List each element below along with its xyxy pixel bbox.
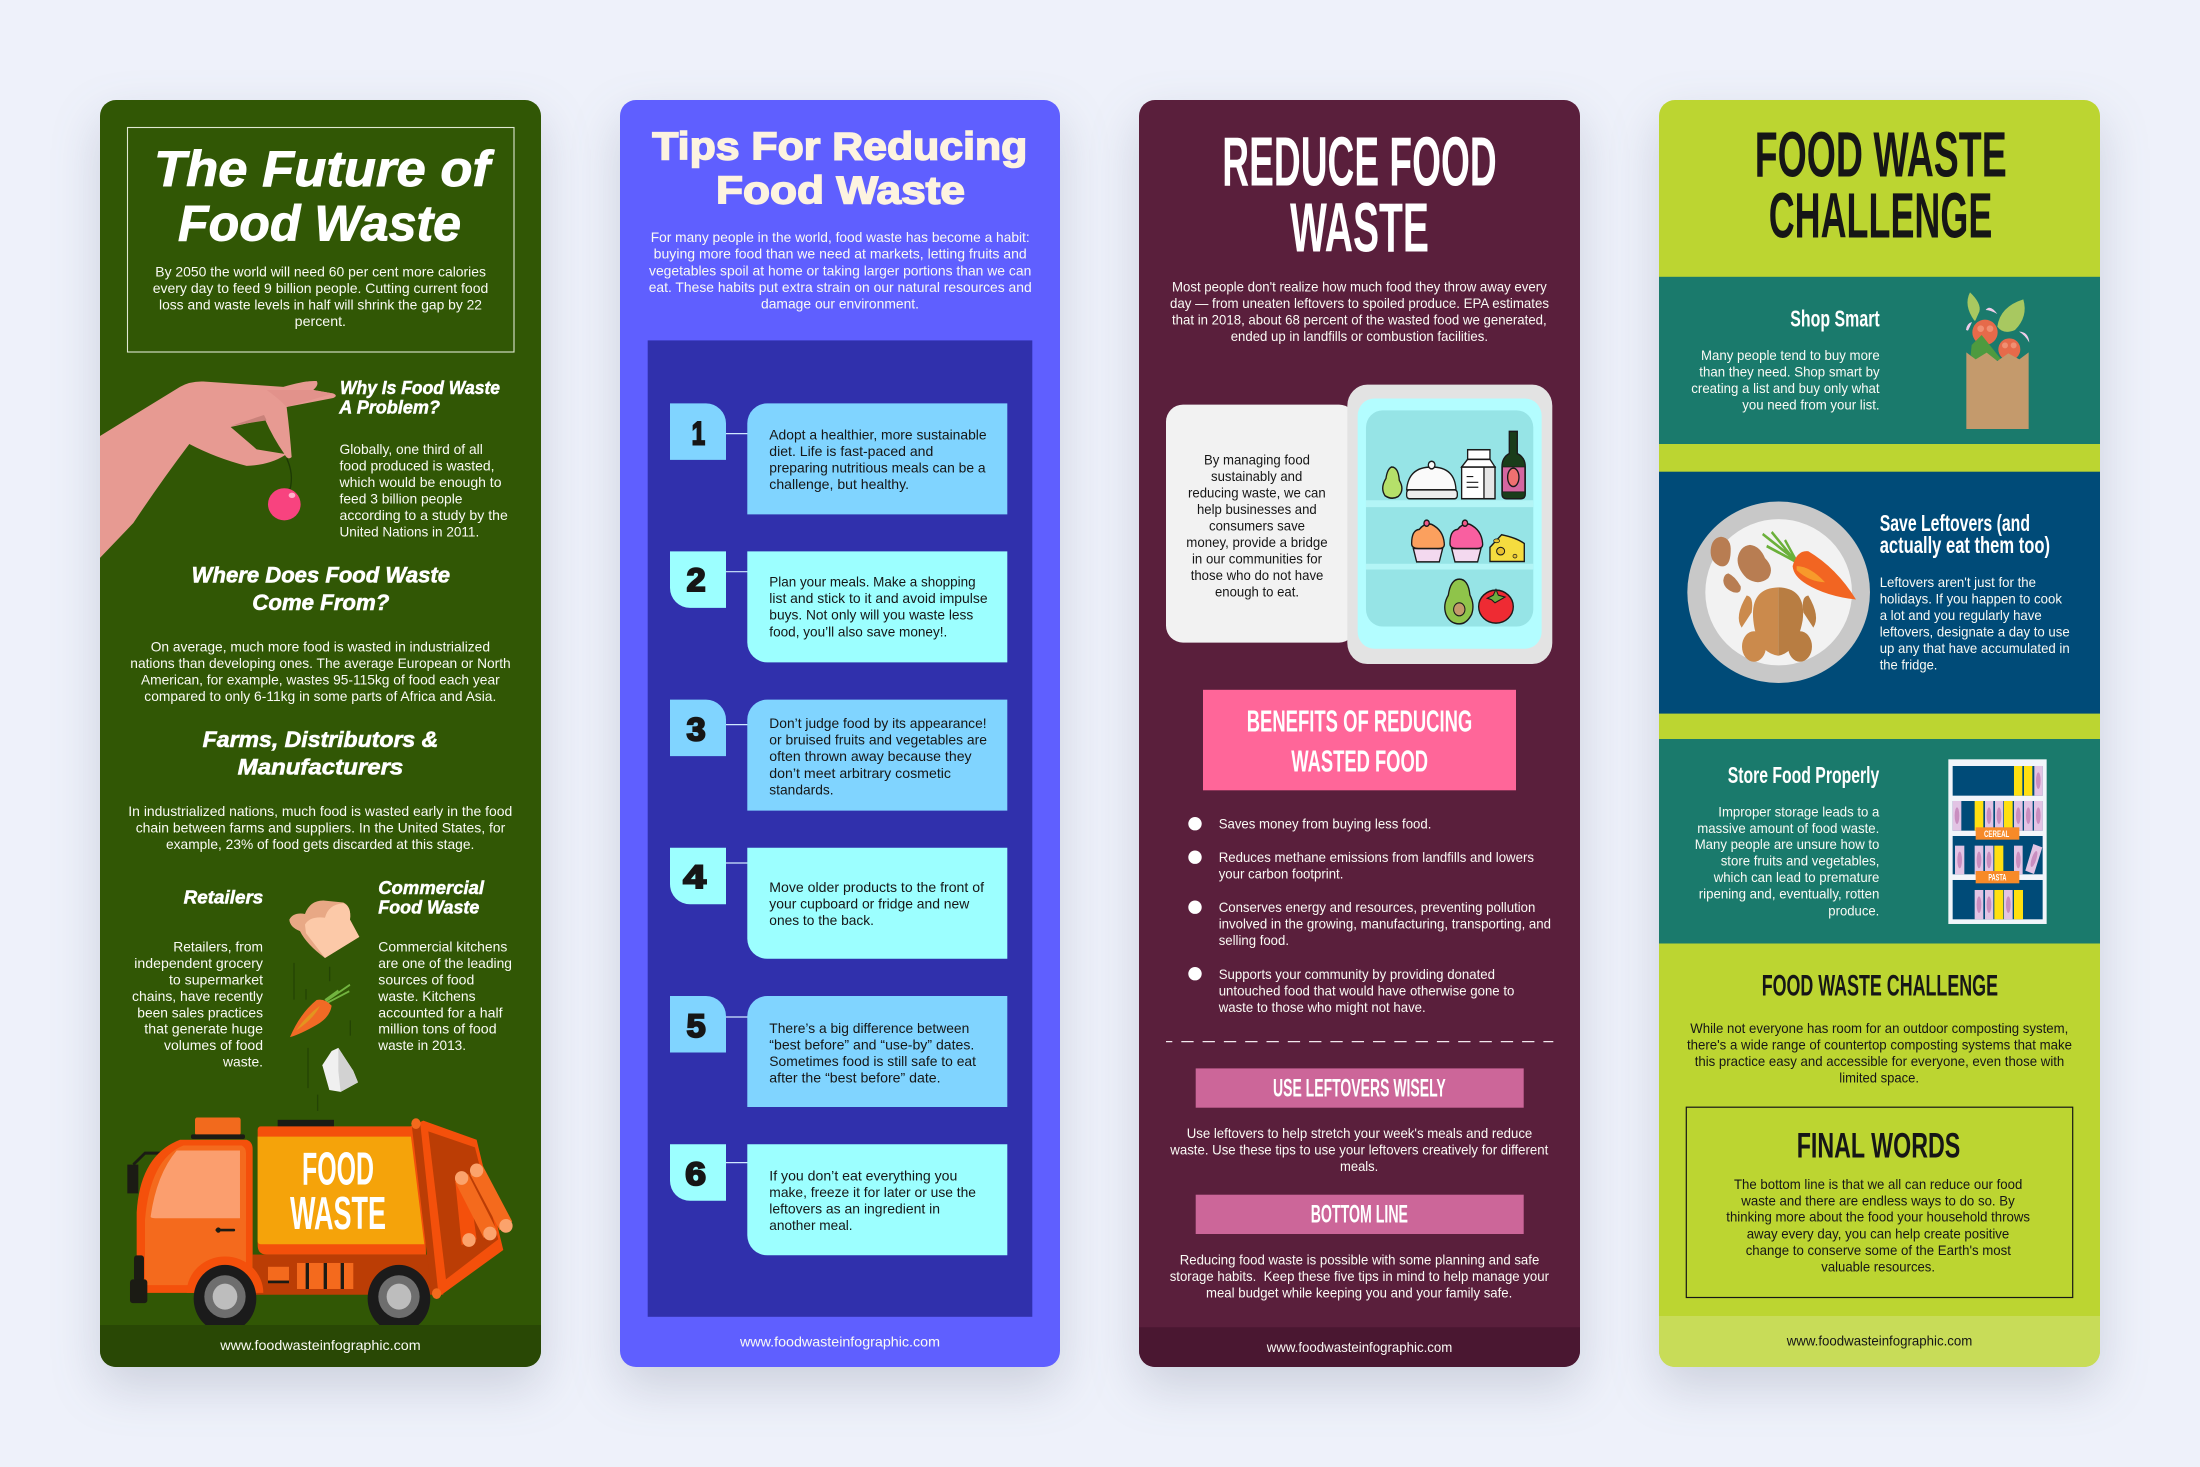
text: retailers: to supermarket bbox=[169, 971, 263, 987]
heading: commercial food waste bbox=[378, 878, 485, 918]
heading: use leftovers wisely bbox=[1196, 1068, 1524, 1108]
text: where does food waste come from: On average, much more food is wasted in industrialized bbox=[151, 639, 490, 655]
heading: why is food waste a problem: Why Is Food Waste bbox=[340, 378, 500, 398]
benefits list bbox=[1188, 816, 1551, 1015]
footer band bbox=[1659, 1316, 2100, 1367]
intro text: buying more food than we need at markets, letting fruits and bbox=[654, 246, 1027, 262]
tip 5: Sometimes food is still safe to eat bbox=[769, 1053, 976, 1069]
tip 5: “best before” and “use-by” dates. bbox=[769, 1037, 974, 1053]
text: final words: waste and there are endless ways to do so. By bbox=[1740, 1192, 2015, 1208]
text: why is food waste a problem: which would be enough to bbox=[338, 474, 502, 490]
callout card: enough to eat. bbox=[1215, 583, 1299, 599]
tip 1: preparing nutritious meals can be a bbox=[769, 460, 986, 476]
tip 1: challenge, but healthy. bbox=[769, 476, 909, 492]
text: commercial food waste bbox=[377, 938, 512, 1053]
title bbox=[1755, 119, 2007, 252]
tip 2: 2 bbox=[687, 562, 706, 598]
intro text: eat. These habits put extra strain on our natural resources and bbox=[649, 279, 1032, 295]
text: final words: The bottom line is that we all can reduce our food bbox=[1734, 1176, 2022, 1192]
text: why is food waste a problem: Globally, one third of all bbox=[340, 441, 483, 457]
tip 6: make, freeze it for later or use the bbox=[769, 1184, 976, 1200]
tips container bbox=[648, 340, 1032, 1317]
tip 6 bbox=[670, 1144, 1007, 1255]
text: bottom line: Reducing food waste is possible with some planning and safe bbox=[1180, 1251, 1540, 1267]
text: shop smart: Many people tend to buy more bbox=[1701, 347, 1880, 363]
heading: farms, distributors and manufacturers: Manufacturers bbox=[238, 754, 403, 779]
title box bbox=[128, 128, 514, 352]
title: Food Waste bbox=[716, 170, 965, 213]
footer band bbox=[100, 1325, 541, 1367]
text: bottom line: meal budget while keeping you and your family safe. bbox=[1206, 1284, 1512, 1300]
benefits list: selling food. bbox=[1219, 932, 1289, 948]
heading: why is food waste a problem bbox=[338, 378, 500, 418]
text: store food properly: Improper storage leads to a bbox=[1718, 803, 1879, 819]
text: shop smart: creating a list and buy only what bbox=[1691, 380, 1880, 396]
panel: Food Waste Challenge bbox=[1659, 100, 2100, 1367]
icon: pantry shelf: CEREAL bbox=[1984, 829, 2010, 839]
intro text: loss and waste levels in half will shrink the gap by 22 bbox=[159, 297, 482, 313]
text: food waste challenge bbox=[1687, 1020, 2072, 1085]
heading: use leftovers wisely: USE LEFTOVERS WISELY bbox=[1273, 1074, 1446, 1102]
callout card: money, provide a bridge bbox=[1186, 534, 1328, 550]
text: retailers: chains, have recently bbox=[132, 988, 263, 1004]
tip 2: buys. Not only will you waste less bbox=[769, 607, 973, 623]
tip 3 bbox=[670, 700, 1007, 811]
benefits list: your carbon footprint. bbox=[1219, 866, 1343, 882]
tip 2: list and stick to it and avoid impulse bbox=[769, 590, 988, 606]
text: store food properly bbox=[1695, 803, 1880, 918]
title: FOOD WASTE bbox=[1755, 119, 2007, 191]
text: shop smart bbox=[1691, 347, 1880, 412]
section: store food properly bbox=[1659, 739, 2100, 944]
heading: commercial food waste: Food Waste bbox=[378, 898, 479, 918]
intro text: vegetables spoil at home or taking larger portions than we can bbox=[649, 262, 1031, 278]
intro text: day — from uneaten leftovers to spoiled produce. EPA estimates bbox=[1170, 295, 1549, 311]
text: commercial food waste: are one of the leading bbox=[378, 955, 512, 971]
text: store food properly: massive amount of food waste. bbox=[1697, 820, 1879, 836]
text: why is food waste a problem bbox=[338, 441, 508, 539]
icon: falling food scraps bbox=[289, 901, 359, 1111]
tip 3: often thrown away because they bbox=[769, 748, 972, 764]
text: shop smart: you need from your list. bbox=[1742, 396, 1880, 412]
icon: pantry shelf bbox=[1948, 759, 2047, 924]
text: save leftovers: holidays. If you happen to cook bbox=[1880, 590, 2063, 606]
heading: shop smart: Shop Smart bbox=[1790, 305, 1880, 331]
panel: Reduce Food Waste bbox=[1139, 100, 1580, 1367]
text: retailers bbox=[132, 938, 263, 1070]
callout card: sustainably and bbox=[1211, 468, 1302, 484]
footer band: www.foodwasteinfographic.com bbox=[1266, 1339, 1452, 1355]
text: commercial food waste: Commercial kitchens bbox=[378, 938, 507, 954]
text: food waste challenge: this practice easy and accessible for everyone, even those with bbox=[1695, 1053, 2064, 1069]
icon: garbage truck bbox=[127, 1118, 513, 1332]
title: Food Waste bbox=[178, 195, 461, 251]
text: food waste challenge: there's a wide range of countertop composting systems that make bbox=[1687, 1037, 2072, 1053]
tip 5: after the “best before” date. bbox=[769, 1070, 941, 1086]
text: retailers: that generate huge bbox=[144, 1021, 263, 1037]
text: why is food waste a problem: according to a study by the bbox=[340, 507, 508, 523]
text: use leftovers wisely: Use leftovers to help stretch your week's meals and reduce bbox=[1187, 1125, 1532, 1141]
text: food waste challenge: While not everyone has room for an outdoor composting system, bbox=[1690, 1020, 2068, 1036]
intro text: every day to feed 9 billion people. Cutting current food bbox=[153, 280, 488, 296]
heading: save leftovers bbox=[1880, 510, 2050, 558]
text: save leftovers: the fridge. bbox=[1880, 656, 1937, 672]
text: use leftovers wisely bbox=[1169, 1125, 1548, 1174]
text: where does food waste come from: American, for example, wastes 95-115kg of food each year bbox=[141, 672, 500, 688]
text: save leftovers: Leftovers aren't just for the bbox=[1880, 574, 2036, 590]
heading: final words: FINAL WORDS bbox=[1797, 1127, 1960, 1166]
text: commercial food waste: waste. Kitchens bbox=[377, 988, 476, 1004]
text: final words bbox=[1726, 1176, 2030, 1274]
intro text: percent. bbox=[295, 313, 346, 329]
callout card bbox=[1166, 405, 1356, 643]
text: store food properly: produce. bbox=[1828, 902, 1879, 918]
text: save leftovers: up any that have accumulated in bbox=[1880, 640, 2070, 656]
tip 4 bbox=[670, 848, 1007, 959]
icon: dinner plate bbox=[1687, 501, 1870, 683]
heading: save leftovers: Save Leftovers (and bbox=[1880, 510, 2030, 536]
text: use leftovers wisely: meals. bbox=[1340, 1158, 1378, 1174]
text: store food properly: store fruits and vegetables, bbox=[1721, 853, 1879, 869]
benefits list: untouched food that would have otherwise gone to bbox=[1219, 983, 1515, 999]
heading: where does food waste come from: Come From? bbox=[252, 590, 389, 615]
icon: hand holding a cherry bbox=[100, 381, 336, 558]
title bbox=[1222, 123, 1497, 266]
intro text bbox=[1170, 279, 1549, 344]
heading: retailers: Retailers bbox=[184, 888, 263, 908]
callout card: in our communities for bbox=[1192, 550, 1322, 566]
icon: grocery bag bbox=[1966, 292, 2029, 429]
intro text bbox=[649, 229, 1032, 311]
intro text: damage our environment. bbox=[761, 295, 919, 311]
text: why is food waste a problem: United Nations in 2011. bbox=[340, 523, 479, 539]
text: retailers: been sales practices bbox=[137, 1004, 263, 1020]
benefits list: Saves money from buying less food. bbox=[1219, 816, 1431, 832]
tip 1: diet. Life is fast-paced and bbox=[769, 443, 933, 459]
tip 4: your cupboard or fridge and new bbox=[769, 896, 970, 912]
text: commercial food waste: accounted for a half bbox=[378, 1004, 503, 1020]
final words box bbox=[1686, 1107, 2073, 1298]
text: retailers: waste. bbox=[222, 1054, 263, 1070]
footer band: www.foodwasteinfographic.com bbox=[1786, 1332, 1972, 1348]
text: retailers: volumes of food bbox=[164, 1037, 263, 1053]
heading: farms, distributors and manufacturers bbox=[203, 727, 438, 779]
title: The Future of bbox=[154, 141, 495, 197]
callout card: reducing waste, we can bbox=[1188, 485, 1326, 501]
text: final words: thinking more about the food your household throws bbox=[1726, 1209, 2030, 1225]
text: commercial food waste: waste in 2013. bbox=[377, 1037, 466, 1053]
icon: open fridge with food bbox=[1347, 385, 1552, 664]
intro text: that in 2018, about 68 percent of the wasted food we generated, bbox=[1172, 312, 1547, 328]
intro text: By 2050 the world will need 60 per cent more calories bbox=[155, 264, 486, 280]
text: food waste challenge: limited space. bbox=[1839, 1069, 1919, 1085]
tip 4: ones to the back. bbox=[769, 912, 874, 928]
footer url: www.foodwasteinfographic.com bbox=[739, 1334, 940, 1350]
tip 2 bbox=[670, 551, 1007, 662]
benefits list: Conserves energy and resources, preventing pollution bbox=[1219, 899, 1535, 915]
text: retailers: Retailers, from bbox=[173, 938, 263, 954]
heading: store food properly: Store Food Properly bbox=[1728, 762, 1879, 788]
text: farms, distributors and manufacturers: chain between farms and suppliers. In the United States, for bbox=[136, 819, 506, 835]
callout card: By managing food bbox=[1204, 452, 1310, 468]
tip 4: 4 bbox=[683, 859, 706, 895]
text: farms, distributors and manufacturers: example, 23% of food gets discarded at this stage. bbox=[166, 836, 474, 852]
heading: bottom line: BOTTOM LINE bbox=[1311, 1200, 1408, 1228]
title: Tips For Reducing bbox=[652, 126, 1027, 169]
footer band: www.foodwasteinfographic.com bbox=[219, 1337, 421, 1353]
icon: garbage truck: WASTE bbox=[290, 1187, 386, 1239]
tip 6: leftovers as an ingredient in bbox=[769, 1200, 940, 1216]
text: bottom line: storage habits. Keep these five tips in mind to help manage your bbox=[1170, 1268, 1549, 1284]
benefits list: involved in the growing, manufacturing, transporting, and bbox=[1219, 916, 1551, 932]
panel: Tips For Reducing Food Waste bbox=[620, 100, 1060, 1367]
tip 4: Move older products to the front of bbox=[769, 879, 984, 895]
tip 6: 6 bbox=[685, 1156, 706, 1192]
benefits heading: BENEFITS OF REDUCING bbox=[1247, 703, 1472, 738]
benefits heading bbox=[1203, 690, 1516, 790]
benefits list: waste to those who might not have. bbox=[1218, 999, 1426, 1015]
tip 2: food, you’ll also save money!. bbox=[769, 623, 947, 639]
benefits list: Reduces methane emissions from landfills and lowers bbox=[1219, 849, 1534, 865]
heading: why is food waste a problem: A Problem? bbox=[338, 398, 440, 418]
text: final words: change to conserve some of the Earth's most bbox=[1746, 1242, 2011, 1258]
tip 3: or bruised fruits and vegetables are bbox=[769, 732, 987, 748]
panel: The Future of Food Waste bbox=[100, 100, 541, 1367]
heading: save leftovers: actually eat them too) bbox=[1880, 532, 2050, 558]
text: final words: valuable resources. bbox=[1821, 1258, 1935, 1274]
title: WASTE bbox=[1290, 188, 1429, 266]
text: use leftovers wisely: waste. Use these tips to use your leftovers creatively for different bbox=[1169, 1142, 1548, 1158]
text: commercial food waste: million tons of food bbox=[378, 1021, 497, 1037]
intro text: ended up in landfills or combustion facilities. bbox=[1231, 328, 1488, 344]
tip 5: 5 bbox=[687, 1008, 706, 1044]
text: save leftovers: a lot and you regularly have bbox=[1880, 607, 2042, 623]
text: save leftovers: leftovers, designate a day to use bbox=[1880, 624, 2070, 640]
text: where does food waste come from bbox=[130, 639, 511, 704]
text: where does food waste come from: nations than developing ones. The average European or North bbox=[130, 655, 511, 671]
title: CHALLENGE bbox=[1769, 180, 1992, 252]
icon: pantry shelf: PASTA bbox=[1988, 873, 2006, 883]
heading: where does food waste come from: Where Does Food Waste bbox=[192, 562, 450, 587]
tip 6: If you don’t eat everything you bbox=[769, 1167, 957, 1183]
intro text: For many people in the world, food waste has become a habit: bbox=[651, 229, 1030, 245]
tip 5 bbox=[670, 996, 1007, 1107]
text: bottom line bbox=[1170, 1251, 1549, 1300]
tip 6: another meal. bbox=[769, 1217, 853, 1233]
text: final words: away every day, you can help create positive bbox=[1747, 1226, 2009, 1242]
text: where does food waste come from: compared to only 6-11kg in some parts of Africa and Asia. bbox=[144, 688, 496, 704]
footer band bbox=[1139, 1327, 1580, 1367]
text: commercial food waste: sources of food bbox=[378, 971, 474, 987]
callout card: those who do not have bbox=[1191, 567, 1324, 583]
intro text: Most people don't realize how much food they throw away every bbox=[1172, 279, 1547, 295]
callout card: help businesses and bbox=[1197, 501, 1317, 517]
tip 3: standards. bbox=[769, 781, 834, 797]
tip 1 bbox=[670, 403, 1007, 514]
text: store food properly: ripening and, eventually, rotten bbox=[1699, 886, 1879, 902]
tip 3: Don’t judge food by its appearance! bbox=[769, 715, 987, 731]
text: farms, distributors and manufacturers: In industrialized nations, much food is wasted early in the food bbox=[128, 803, 512, 819]
tip 5: There’s a big difference between bbox=[769, 1020, 969, 1036]
text: shop smart: than they need. Shop smart by bbox=[1699, 364, 1880, 380]
title bbox=[652, 126, 1027, 213]
heading: farms, distributors and manufacturers: Farms, Distributors & bbox=[203, 727, 438, 752]
heading: bottom line bbox=[1196, 1195, 1524, 1234]
text: store food properly: which can lead to premature bbox=[1713, 869, 1880, 885]
benefits heading: WASTED FOOD bbox=[1291, 744, 1428, 778]
tip 1: Adopt a healthier, more sustainable bbox=[769, 426, 987, 442]
text: why is food waste a problem: feed 3 billion people bbox=[340, 490, 463, 506]
intro text bbox=[153, 264, 488, 329]
tip 3: 3 bbox=[687, 711, 706, 747]
callout card: consumers save bbox=[1209, 518, 1305, 534]
title: REDUCE FOOD bbox=[1222, 123, 1497, 201]
section: shop smart bbox=[1659, 277, 2100, 444]
text: why is food waste a problem: food produced is wasted, bbox=[340, 457, 494, 473]
heading: food waste challenge: FOOD WASTE CHALLENGE bbox=[1762, 970, 1998, 1003]
text: save leftovers bbox=[1880, 574, 2070, 672]
title bbox=[154, 141, 495, 251]
text: retailers: independent grocery bbox=[134, 955, 263, 971]
tip 2: Plan your meals. Make a shopping bbox=[769, 574, 976, 590]
heading: where does food waste come from bbox=[192, 562, 450, 615]
text: store food properly: Many people are unsure how to bbox=[1695, 836, 1880, 852]
heading: commercial food waste: Commercial bbox=[378, 878, 485, 898]
benefits list: Supports your community by providing donated bbox=[1219, 966, 1495, 982]
tip 3: don’t meet arbitrary cosmetic bbox=[769, 765, 951, 781]
tip 1: 1 bbox=[692, 415, 705, 451]
text: farms, distributors and manufacturers bbox=[128, 803, 512, 852]
icon: garbage truck: FOOD bbox=[302, 1142, 374, 1194]
section: save leftovers bbox=[1659, 472, 2100, 714]
